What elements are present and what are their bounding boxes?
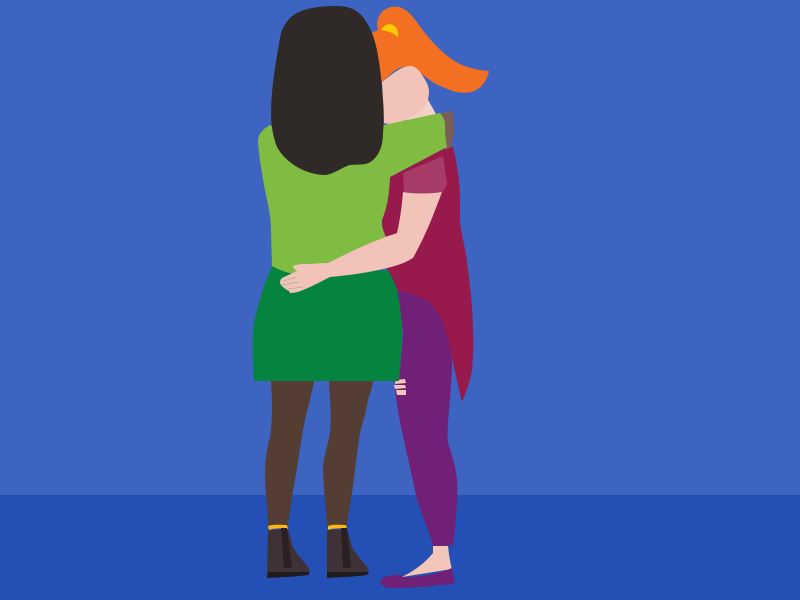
embracing arm and hand — [280, 192, 442, 293]
black hair — [271, 6, 384, 175]
figure: woman with orange hair — [372, 7, 489, 588]
face — [382, 66, 429, 125]
neck — [400, 98, 441, 135]
right leg in brown tights — [323, 381, 373, 526]
yellow hair tie — [381, 24, 398, 38]
boot body — [267, 529, 310, 578]
boot body — [327, 529, 369, 578]
tunic sleeve — [403, 156, 447, 194]
brown shoulder strap — [440, 111, 454, 150]
figure: woman with black hair, seen from behind — [253, 6, 447, 578]
maroon tunic — [382, 147, 473, 402]
orange hair ponytail — [372, 7, 489, 93]
boot cuff — [328, 525, 347, 530]
boot cuff — [268, 525, 288, 530]
finger lines — [282, 277, 303, 289]
green skirt — [253, 266, 402, 381]
purple trousers leg — [395, 290, 457, 546]
bare ankle and foot — [402, 546, 452, 577]
left leg in brown tights — [265, 381, 314, 526]
floor — [0, 495, 800, 600]
left ankle boot — [267, 525, 310, 578]
boot zip — [281, 528, 292, 568]
boot zip — [341, 528, 351, 568]
lime green sweater — [258, 113, 447, 274]
forearm and hand — [280, 192, 442, 293]
ripped jeans skin stripes — [394, 379, 406, 395]
purple flat shoe — [380, 568, 455, 588]
boot sole — [267, 572, 310, 578]
right ankle boot — [327, 525, 369, 578]
boot sole — [327, 572, 369, 578]
